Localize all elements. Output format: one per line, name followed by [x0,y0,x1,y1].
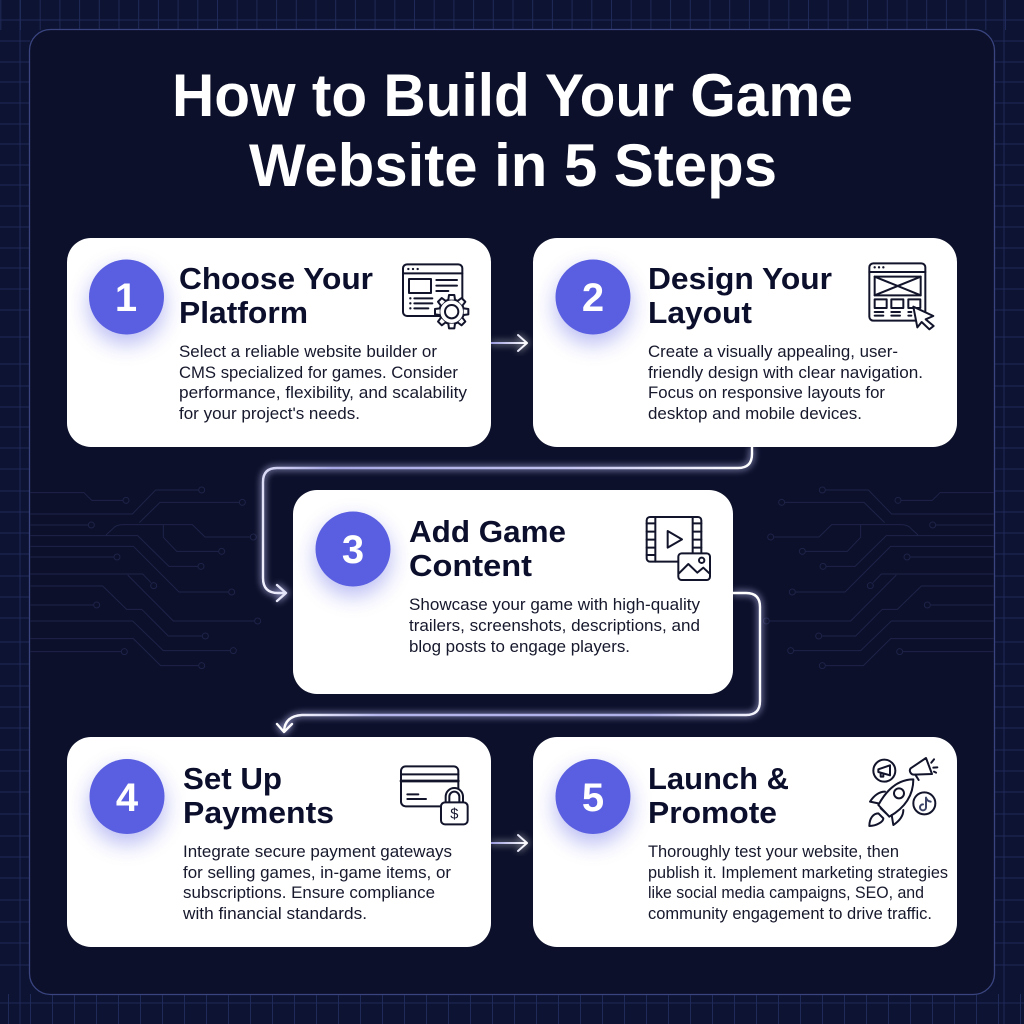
icon: credit card with lock [401,766,468,824]
step 1 number badge [88,260,164,344]
title: Website in 5 Steps [249,132,777,199]
step 5 heading: Launch & [648,761,789,796]
step 3 heading: Add Game [409,514,566,549]
arrow: step 1 to step 2 [491,335,527,351]
step 3 description: trailers, screenshots, descriptions, and [409,616,700,635]
step 1 heading [179,261,373,330]
icon: film and image [647,517,710,580]
step 3 number badge: 3 [342,528,364,572]
step 2 description: Create a visually appealing, user- [648,342,898,361]
step 2 heading: Design Your [648,261,832,296]
panel: step 5 launch and promote [533,737,957,947]
circuit decoration left [30,487,261,669]
step 1 description: Select a reliable website builder or [179,342,437,361]
step 5 description: publish it. Implement marketing strategies [648,863,948,882]
step 5 description [648,842,948,923]
step 4 number badge [89,759,165,844]
step 2 description: desktop and mobile devices. [648,404,862,423]
step 4 description: subscriptions. Ensure compliance [183,883,435,902]
step 2 description: friendly design with clear navigation. [648,363,923,382]
step 4 heading: Payments [183,795,334,830]
step 4 description: with financial standards. [182,904,367,923]
step 4 description: Integrate secure payment gateways [183,842,452,861]
step 5 heading: Promote [648,795,777,830]
step 3 description [409,595,701,656]
step 2 number badge [555,260,631,344]
step 2 number badge: 2 [582,276,604,320]
panel: step 4 set up payments [67,737,491,947]
step 3 number badge [315,512,391,596]
step 5 number badge [555,759,631,844]
step 1 description: CMS specialized for games. Consider [179,363,458,382]
step 1 description: for your project's needs. [179,404,360,423]
icon: rocket with megaphone [869,758,937,826]
step 3 description: Showcase your game with high-quality [409,595,701,614]
arrow: step 2 to step 3 [263,447,752,601]
title: How to Build Your Game [172,62,853,129]
step 3 heading: Content [409,548,532,583]
step 5 description: like social media campaigns, SEO, and [648,883,924,902]
step 5 heading [648,761,789,830]
icon: browser with gear [403,264,468,328]
step 4 heading: Set Up [183,761,282,796]
step 4 description [182,842,452,923]
icon: wireframe with cursor [869,263,934,329]
step 1 description [179,342,468,423]
step 1 heading: Choose Your [179,261,373,296]
step 1 number badge: 1 [115,276,137,320]
step 2 description: Focus on responsive layouts for [648,383,885,402]
icon: credit card with lock: $ [450,807,458,823]
arrow: step 4 to step 5 [491,835,527,851]
step 5 number badge: 5 [582,776,604,820]
step 1 description: performance, flexibility, and scalability [179,383,468,402]
step 1 heading: Platform [179,295,308,330]
step 2 heading [648,261,832,330]
step 3 heading [409,514,566,583]
step 3 description: blog posts to engage players. [409,637,630,656]
arrow: step 3 to step 4 [277,593,760,732]
step 5 description: community engagement to drive traffic. [648,904,932,923]
step 2 description [648,342,923,423]
circuit decoration right [763,487,994,669]
title [172,62,853,199]
step 5 description: Thoroughly test your website, then [648,842,899,861]
panel: step 3 add game content [293,490,733,694]
step 4 heading [183,761,334,830]
step 4 number badge: 4 [116,776,139,820]
step 2 heading: Layout [648,295,752,330]
panel: step 1 choose your platform [67,238,491,447]
panel: step 2 design your layout [533,238,957,447]
step 4 description: for selling games, in-game items, or [183,863,451,882]
